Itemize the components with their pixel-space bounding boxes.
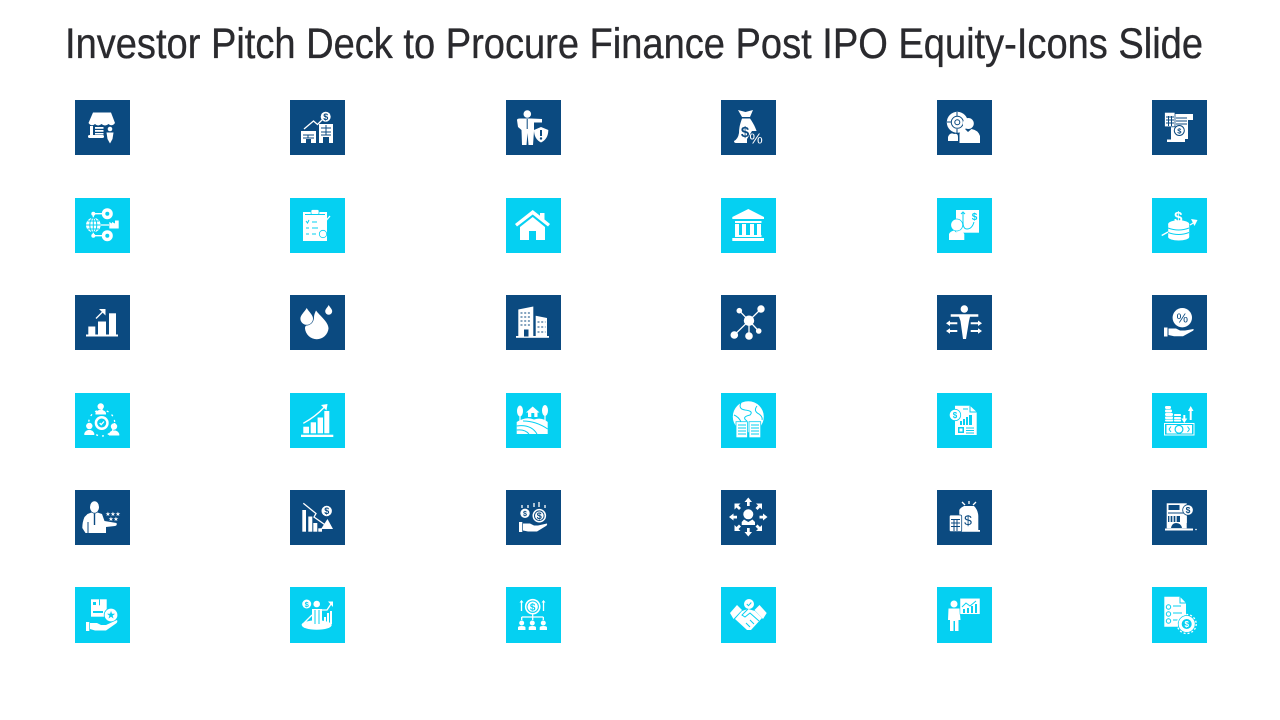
icon: money bag with percent: $ — [741, 124, 750, 141]
icon: hand holding box with star badge: ★ — [107, 610, 116, 620]
icon: office building with coin — [1152, 490, 1207, 545]
icon: team around gear with check — [75, 393, 130, 448]
icon: financial report with coin: $ — [953, 411, 958, 420]
icon: office buildings — [506, 295, 561, 350]
icon: businessman with rating stars — [75, 490, 130, 545]
icon: businessman with rating stars: ★ — [113, 516, 119, 523]
icon: coin over three people: $ — [530, 602, 536, 614]
icon: businessman with shield — [506, 100, 561, 155]
icon: cash and coins with arrows — [1152, 393, 1207, 448]
icon: storefront with person — [75, 100, 130, 155]
icon: person with strategy board: $ — [972, 212, 978, 223]
icon: hub and spoke network — [721, 295, 776, 350]
icon: businessman with rating stars: ★ — [110, 511, 116, 518]
icon: falling bar chart with coin — [290, 490, 345, 545]
icon: water drops — [290, 295, 345, 350]
icon: hand holding percent coin: % — [1177, 310, 1189, 326]
icon: coin over three people — [506, 587, 561, 643]
icon: checklist document with gear — [1152, 587, 1207, 643]
icon: clipboard checklist with pencil — [290, 198, 345, 253]
icon: person with directional arrows — [937, 295, 992, 350]
icon: target with person — [937, 100, 992, 155]
icon: checklist document with gear: $ — [1184, 620, 1189, 629]
icon: house — [506, 198, 561, 253]
icon: coin stack with arrow and dollar — [1152, 198, 1207, 253]
icon: financial report with coin — [937, 393, 992, 448]
icon: businessman with rating stars: ★ — [115, 511, 121, 518]
icon: globe network with factory — [75, 198, 130, 253]
icon: person with strategy board — [937, 198, 992, 253]
icon: money bag and calculator: $ — [964, 512, 972, 528]
icon: calculator and receipt: $ — [1177, 126, 1182, 136]
icon: rising bar chart with arrow — [75, 295, 130, 350]
icon: person on platform with chart and coin — [290, 587, 345, 643]
icon: calculator and receipt — [1152, 100, 1207, 155]
icon: growth bars with trend arrow — [290, 393, 345, 448]
icon: farmland with house and trees — [506, 393, 561, 448]
icon: businessman with rating stars: ★ — [108, 516, 114, 523]
icon: person on platform with chart and coin: $ — [305, 600, 310, 609]
icon: falling bar chart with coin: $ — [324, 506, 329, 516]
icon: coin stack with arrow and dollar: $ — [1174, 209, 1183, 226]
icon: hand holding percent coin — [1152, 295, 1207, 350]
icon: person with radiating arrows — [721, 490, 776, 545]
icon: money bag with percent — [721, 100, 776, 155]
icon: hand receiving coins: $ — [537, 511, 542, 521]
icon: businessman with rating stars: ★ — [105, 511, 111, 518]
icon: presenter with chart board — [937, 587, 992, 643]
icon: hand receiving coins: $ — [523, 511, 527, 518]
icon: hand holding box with star badge — [75, 587, 130, 643]
icon: growth chart with buildings and coin: $ — [323, 112, 328, 122]
icon: handshake with check — [721, 587, 776, 643]
icon: money bag with percent: % — [749, 130, 763, 148]
icon: globe with open book — [721, 393, 776, 448]
icon: office building with coin: $ — [1186, 505, 1191, 515]
icon: bank building — [721, 198, 776, 253]
icon: growth chart with buildings and coin — [290, 100, 345, 155]
icon: hand receiving coins — [506, 490, 561, 545]
icon: money bag and calculator — [937, 490, 992, 545]
